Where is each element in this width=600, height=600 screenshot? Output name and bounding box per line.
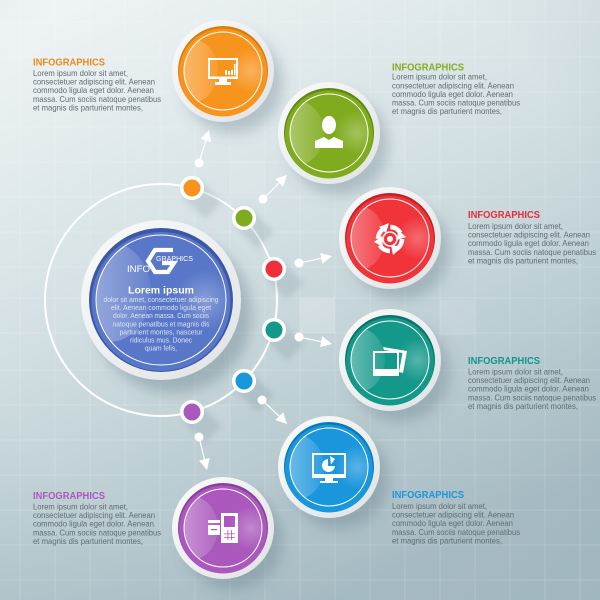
text: orange (33, 56, 161, 112)
central text: dolor. Aenean massa. Cum sociis (113, 311, 209, 320)
ring connector (45, 184, 277, 416)
text: blue: Lorem ipsum dolor sit amet, (392, 501, 487, 511)
text: purple: et magnis dis parturient montes, (33, 536, 143, 546)
icon: monitor pie chart (312, 453, 346, 483)
text: red: Lorem ipsum dolor sit amet, (468, 221, 563, 231)
central text: natoque penatibus et magnis dis (112, 320, 210, 328)
button: teal (331, 309, 450, 422)
text: green: INFOGRAPHICS (392, 62, 464, 74)
text: teal: et magnis dis parturient montes, (468, 401, 578, 411)
panel: central circle (67, 220, 252, 393)
arrow: red (294, 253, 332, 268)
text: orange: et magnis dis parturient montes, (33, 102, 143, 112)
text: red: commodo ligula eget dolor. Aenean (468, 238, 589, 248)
icon: person (315, 116, 343, 148)
text: orange: massa. Cum sociis natoque penatibus (33, 94, 161, 104)
node: red (262, 257, 304, 300)
button: red (331, 187, 450, 300)
text: green: et magnis dis parturient montes, (392, 106, 502, 116)
text: blue: massa. Cum sociis natoque penatibus (392, 527, 520, 537)
central text: dolor sit amet, consectetuer adipiscing (104, 295, 218, 304)
icon: target with arrows (374, 223, 406, 255)
central text: ridiculus mus. Donec (130, 336, 192, 344)
text: red (468, 209, 596, 265)
text: green (392, 62, 520, 116)
logo: info graphics (127, 250, 193, 275)
text: teal: Lorem ipsum dolor sit amet, (468, 366, 563, 376)
button: orange (164, 20, 283, 133)
arrow: teal (294, 332, 332, 347)
text: red: INFOGRAPHICS (468, 209, 540, 221)
text: orange: consectetuer adipiscing elit. Aenean (33, 77, 155, 87)
text: blue: et magnis dis parturient montes, (392, 535, 502, 545)
text: teal (468, 355, 596, 411)
text: blue: INFOGRAPHICS (392, 489, 464, 501)
text: green: massa. Cum sociis natoque penatibus (392, 98, 520, 108)
logo: info graphics: GRAPHICS (156, 254, 193, 263)
node: orange (180, 176, 222, 219)
node: teal (262, 318, 304, 361)
button: blue (270, 416, 389, 529)
text: teal: commodo ligula eget dolor. Aenean (468, 384, 589, 394)
central text: parturient montes, nascetur (120, 328, 203, 336)
text: purple (33, 490, 161, 546)
text: purple: consectetuer adipiscing elit. Aenean (33, 510, 155, 520)
node: purple (180, 400, 222, 443)
text: orange: Lorem ipsum dolor sit amet, (33, 68, 128, 78)
text: green: Lorem ipsum dolor sit amet, (392, 72, 487, 82)
text: teal: INFOGRAPHICS (468, 355, 540, 367)
text: orange: INFOGRAPHICS (33, 56, 105, 68)
central text: quam felis, (145, 344, 177, 352)
text: orange: commodo ligula eget dolor. Aenean (33, 85, 154, 95)
text: red: et magnis dis parturient montes, (468, 255, 578, 265)
arrow: blue (258, 396, 287, 424)
text: blue (392, 489, 520, 545)
node: green (232, 206, 274, 249)
logo: info graphics: INFO (127, 264, 150, 275)
icon: photos (373, 347, 407, 376)
central text: Lorem ipsum (128, 284, 194, 296)
central text: elit. Aenean commodo ligula eget (111, 303, 212, 312)
text: purple: INFOGRAPHICS (33, 490, 105, 502)
text: blue: consectetuer adipiscing elit. Aenean (392, 510, 514, 520)
text: purple: Lorem ipsum dolor sit amet, (33, 502, 128, 512)
icon: monitor chart (208, 58, 238, 85)
text: blue: commodo ligula eget dolor. Aenean (392, 518, 513, 528)
text: purple: massa. Cum sociis natoque penatibus (33, 527, 161, 537)
icon: phone and card (208, 513, 238, 543)
arrow: purple (194, 432, 210, 470)
arrow: green (258, 175, 287, 204)
arrow: orange (194, 130, 211, 168)
text: green: consectetuer adipiscing elit. Aenean (392, 80, 514, 90)
central text (104, 284, 218, 352)
button: green (270, 82, 389, 195)
node: blue (232, 369, 274, 412)
text: green: commodo ligula eget dolor. Aenean (392, 89, 513, 99)
text: purple: commodo ligula eget dolor. Aenean (33, 519, 154, 529)
button: purple (164, 477, 283, 590)
